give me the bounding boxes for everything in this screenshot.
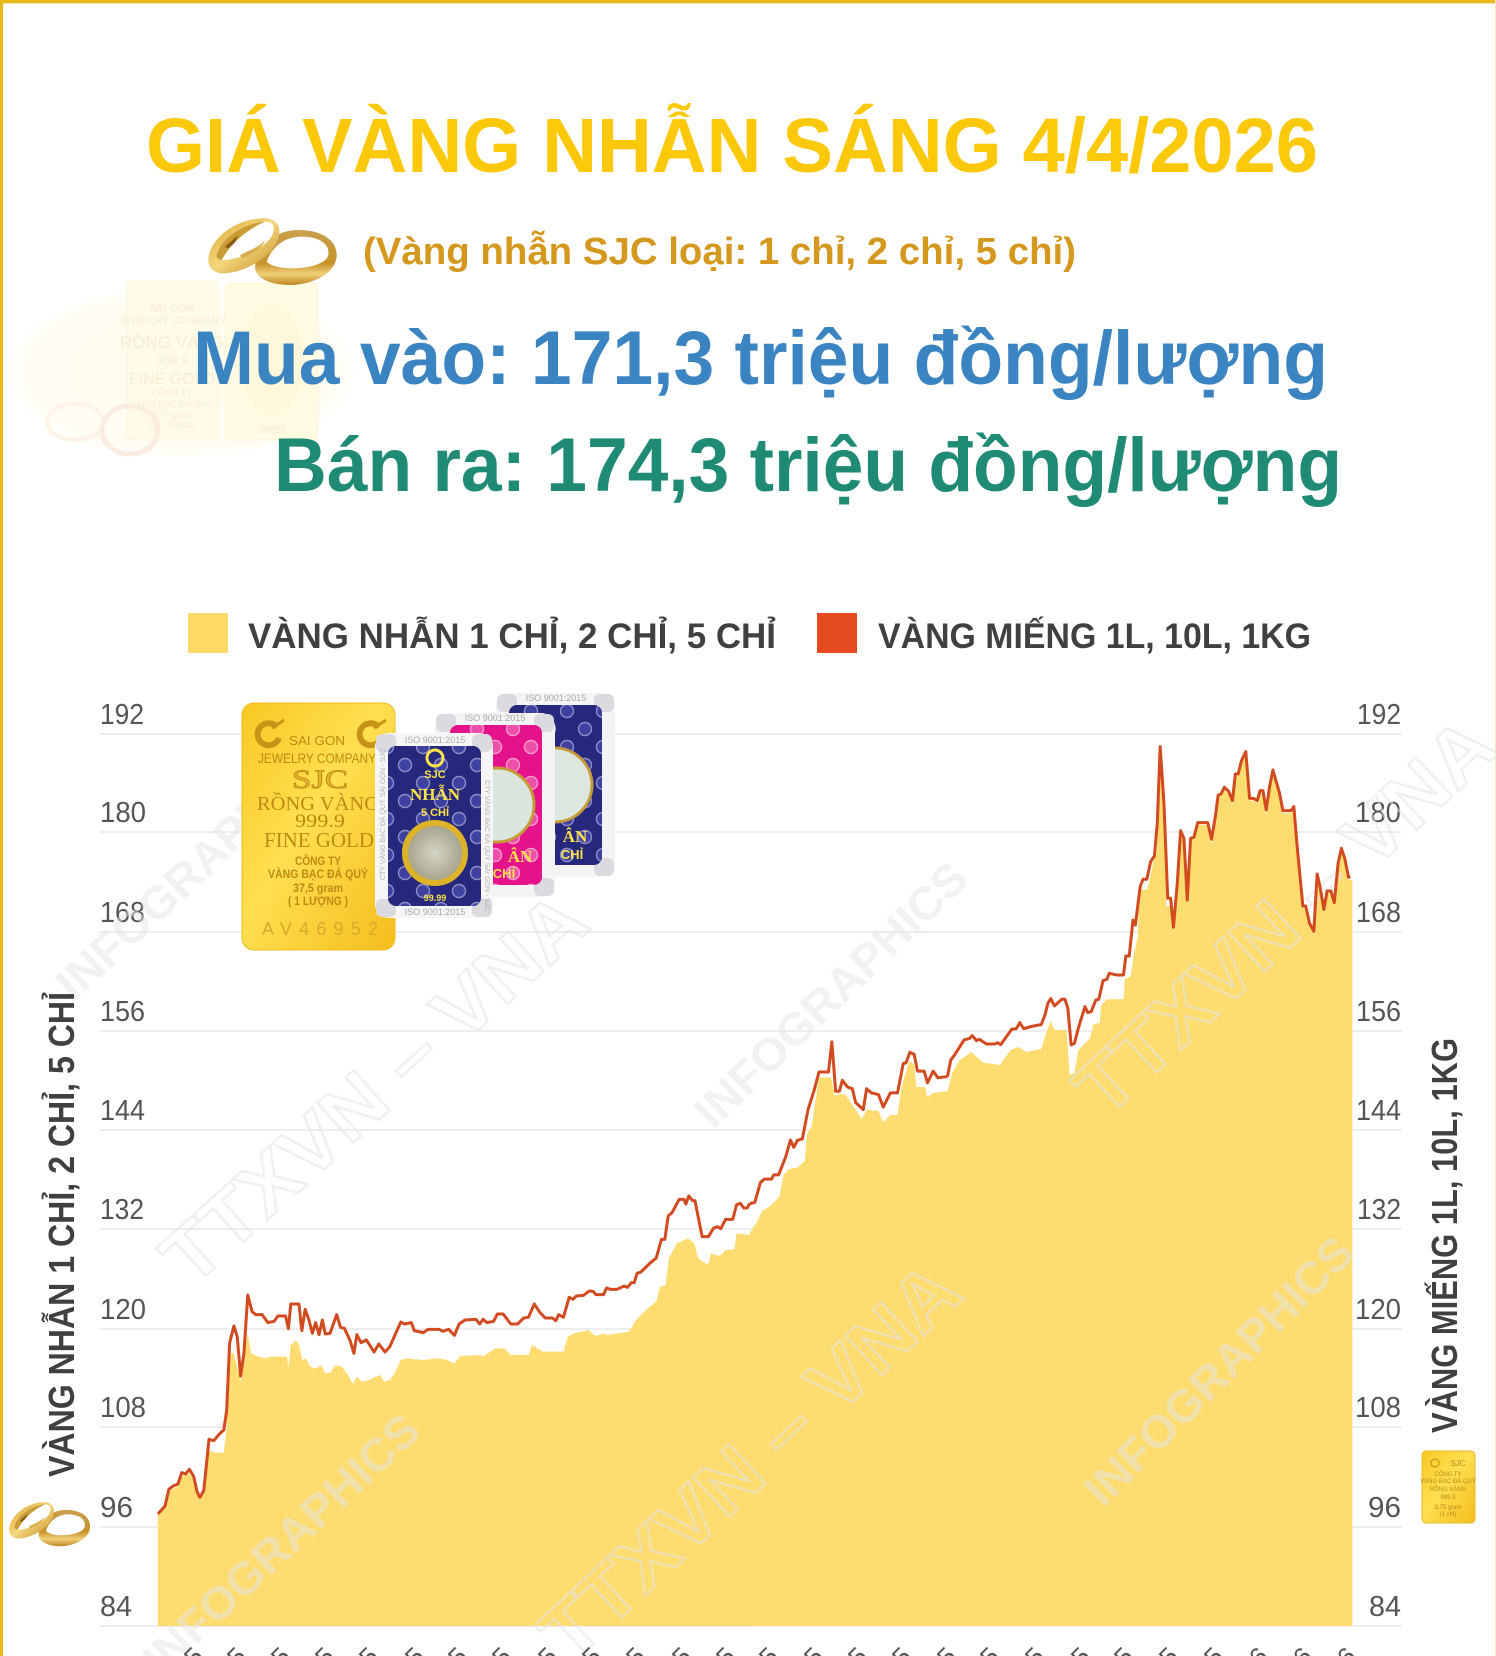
- watermarks: INFOGRAPHICS: [45, 727, 343, 1009]
- icon: small gold bar: [1420, 1451, 1476, 1523]
- image: SJC gold bar: 37,5 gram: [293, 881, 343, 895]
- watermarks: INFOGRAPHICS: [684, 851, 978, 1138]
- pack 1: blue front: NHẪN: [410, 785, 461, 804]
- left axis numbers: 132: [100, 1194, 144, 1226]
- legend swatch: ring gold: [188, 613, 228, 653]
- faded gold background image: VÀNG BẠC ĐÁ QUÝ: [130, 399, 214, 409]
- faded gold background image: FINE GOLD: [129, 371, 215, 388]
- legend label: bar gold: VÀNG MIẾNG 1L, 10L, 1KG: [878, 616, 1311, 656]
- faded gold background image: CÔNG TY: [152, 388, 192, 398]
- right axis numbers: [1355, 699, 1401, 1623]
- legend: [188, 613, 1311, 656]
- chart: [45, 699, 1496, 1656]
- image: SJC gold bar: RỒNG VÀNG: [257, 791, 379, 815]
- watermarks: [45, 700, 1496, 1656]
- pack 1: blue front: ISO 9001:2015: [405, 907, 465, 917]
- watermarks: TTXVN – VNA: [144, 875, 604, 1301]
- icon: small gold bar: VÀNG BẠC ĐÁ QUÝ: [1420, 1478, 1476, 1485]
- faded gold background image: JEWELRY COMPANY: [117, 315, 227, 327]
- image: SJC gold bar: [242, 703, 395, 950]
- x axis date labels: [152, 1641, 1362, 1656]
- image: SJC gold bar: ( 1 LƯỢNG ): [288, 894, 348, 908]
- image: ring packs: [375, 693, 615, 918]
- image: SJC gold bar: JEWELRY COMPANY: [258, 750, 377, 766]
- image: SJC gold bar: CÔNG TY: [295, 853, 341, 868]
- pack 1: blue front: SJC: [424, 769, 446, 781]
- pack 1: blue front: 5 CHỈ: [421, 806, 449, 819]
- watermarks: INFOGRAPHICS: [1074, 1226, 1364, 1516]
- image: SJC gold bar: VÀNG BẠC ĐÁ QUÝ: [268, 866, 368, 881]
- left axis numbers: [100, 699, 146, 1623]
- right axis numbers: 144: [1356, 1095, 1401, 1127]
- pack 1: blue front: CTY VÀNG BẠC ĐÁ QUÝ SÀI GÒN - SJC: [483, 780, 492, 911]
- left axis title: VÀNG NHẪN 1 CHỈ, 2 CHỈ, 5 CHỈ: [40, 992, 82, 1477]
- legend label: ring gold: VÀNG NHẪN 1 CHỈ, 2 CHỈ, 5 CHỈ: [248, 616, 776, 656]
- faded gold background image: 37,5 gram: [152, 410, 192, 420]
- left axis numbers: 120: [100, 1294, 146, 1326]
- icon: small gold bar: 3,75 gram: [1434, 1505, 1462, 1511]
- title: GIÁ VÀNG NHẪN SÁNG 4/4/2026: [146, 102, 1318, 189]
- pack 2: pink: ÂN: [508, 847, 533, 866]
- icon: small gold bar: 999.9: [1440, 1495, 1456, 1501]
- faded gold background image: 9999: [259, 423, 286, 437]
- faded gold background image: 999.9: [156, 353, 188, 368]
- legend swatch: bar gold: [817, 613, 857, 653]
- bar logos: [258, 720, 386, 745]
- grid lines: [100, 734, 1402, 1626]
- left axis numbers: 96: [100, 1492, 133, 1524]
- pack 2: pink: [435, 713, 555, 897]
- faded gold background image: RỒNG VÀNG: [120, 333, 224, 352]
- faded gold background image: [10, 281, 354, 458]
- pack 3: blue: ISO 9001:2015: [526, 693, 586, 703]
- icon: gold rings: [208, 218, 337, 285]
- left axis numbers: 156: [100, 996, 145, 1028]
- left axis numbers: 180: [100, 797, 146, 829]
- buy price: Mua vào: 171,3 triệu đồng/lượng: [193, 316, 1328, 401]
- pack 2: pink: ISO 9001:2015: [465, 713, 525, 723]
- image: SJC gold bar: SAI GON: [289, 733, 345, 748]
- left axis numbers: 144: [100, 1095, 145, 1127]
- right axis numbers: 192: [1357, 699, 1401, 731]
- faded gold background image: SAI GON: [149, 303, 195, 315]
- pack 2: pink: CHỈ: [493, 866, 516, 881]
- pack 1: blue front: CTY VÀNG BẠC ĐÁ QUÝ SÀI GÒN - SJC: [378, 749, 387, 880]
- icon: small gold bar: RỒNG VÀNG: [1430, 1486, 1467, 1493]
- image: SJC gold bar: AV46952: [262, 919, 378, 939]
- icon: small gold rings: [9, 1502, 90, 1546]
- watermarks: TTXVN – VNA: [1057, 700, 1496, 1133]
- area: ring gold price: [150, 700, 1360, 1630]
- image: SJC gold bar: FINE GOLD: [264, 828, 374, 852]
- pack 3: blue: ÂN: [563, 827, 588, 846]
- pack 1: blue front: ISO 9001:2015: [405, 735, 465, 745]
- icon: small gold bar: (1 chỉ): [1440, 1511, 1456, 1518]
- faded gold background image: (1 LƯỢNG): [148, 420, 196, 430]
- icon: small gold bar: CÔNG TY: [1434, 1471, 1462, 1478]
- sell price: Bán ra: 174,3 triệu đồng/lượng: [274, 423, 1342, 508]
- line: bar gold price: [158, 747, 1350, 1514]
- left axis numbers: 108: [100, 1392, 146, 1424]
- left axis numbers: 168: [100, 897, 145, 929]
- image: SJC gold bar: 999.9: [295, 811, 345, 832]
- icon: small gold bar: SJC: [1450, 1459, 1466, 1468]
- right axis numbers: 180: [1355, 797, 1401, 829]
- right axis numbers: 132: [1357, 1194, 1401, 1226]
- pack 3: blue: [496, 693, 615, 877]
- right axis numbers: 168: [1356, 897, 1401, 929]
- right axis title: VÀNG MIẾNG 1L, 10L, 1KG: [1424, 1038, 1465, 1433]
- right axis numbers: 96: [1368, 1492, 1401, 1524]
- subtitle: (Vàng nhẫn SJC loại: 1 chỉ, 2 chỉ, 5 chỉ): [363, 229, 1076, 273]
- right axis numbers: 108: [1355, 1392, 1401, 1424]
- image: SJC gold bar: SJC: [292, 765, 348, 794]
- pack 3: blue: CHỈ: [561, 847, 584, 862]
- right axis numbers: 84: [1369, 1591, 1401, 1623]
- pack 1: blue front: [375, 733, 493, 918]
- pack 1: blue front: 99.99: [424, 893, 446, 903]
- right axis numbers: 156: [1356, 996, 1401, 1028]
- right axis numbers: 120: [1355, 1294, 1401, 1326]
- left axis numbers: 192: [100, 699, 144, 731]
- left axis numbers: 84: [100, 1591, 132, 1623]
